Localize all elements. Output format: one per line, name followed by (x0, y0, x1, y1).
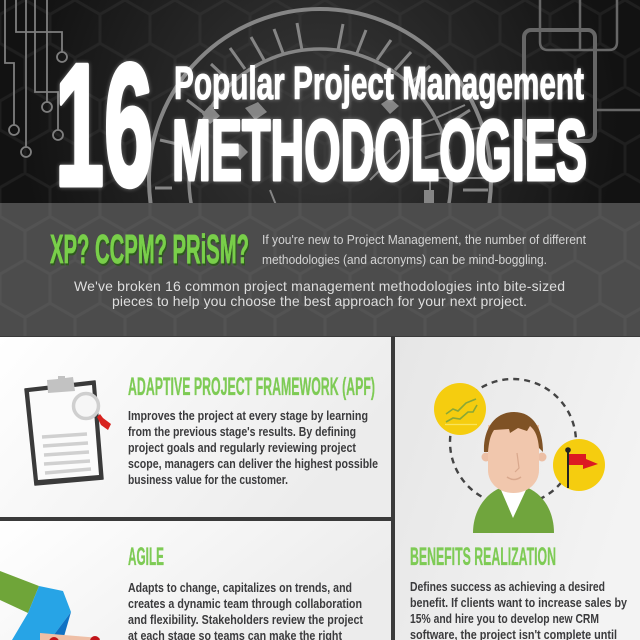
circuit lines left (5, 0, 67, 157)
intro paragraph (74, 278, 565, 309)
icon: flag badge (553, 439, 605, 491)
body text (128, 408, 378, 487)
intro paragraph: pieces to help you choose the best approach for your next project. (112, 293, 527, 309)
gear graphic (147, 7, 493, 203)
circuit lines right (524, 0, 640, 141)
body text (128, 580, 364, 640)
intro band: XP? CCPM? PRiSM? (50, 226, 249, 272)
icon: agile arrow (0, 571, 100, 640)
body text: and flexibility. Stakeholders review the project (128, 612, 364, 627)
panel: adaptive project framework: ADAPTIVE PROJECT FRAMEWORK (APF) (128, 373, 375, 401)
body text: business value for the customer. (128, 472, 288, 487)
title (55, 27, 587, 222)
person (473, 412, 554, 533)
intro text: methodologies (and acronyms) can be mind-boggling. (262, 253, 547, 267)
intro band (0, 203, 640, 337)
panel: adaptive project framework (0, 337, 391, 517)
intro text (262, 233, 586, 267)
big number 16: 16 (55, 27, 153, 222)
intro paragraph: We've broken 16 common project management methodologies into bite-sized (74, 278, 565, 294)
panel: benefits realization (410, 379, 628, 640)
icon: clipboard and magnifier (25, 376, 111, 485)
icon: chart badge (434, 383, 486, 435)
panel grid background (0, 336, 640, 640)
header background (0, 0, 640, 203)
intro text: If you're new to Project Management, the number of different (262, 233, 586, 247)
icon: person with goals (434, 379, 605, 533)
panel: agile: AGILE (128, 543, 164, 571)
body text: Improves the project at every stage by learning (128, 408, 368, 423)
body text: creates a dynamic team through collaboration (128, 596, 362, 611)
body text: from the previous stage's results. By defining (128, 424, 356, 439)
dashed orbit (450, 379, 576, 505)
body text: scope, managers can deliver the highest possible (128, 456, 378, 471)
body text: Adapts to change, capitalizes on trends, and (128, 580, 352, 595)
panel: agile (0, 521, 391, 640)
intro band: XP? CCPM? PRiSM? (51, 228, 250, 274)
green question heading (50, 226, 250, 274)
body text: project goals and regularly reviewing project (128, 440, 357, 455)
body text (410, 579, 628, 640)
